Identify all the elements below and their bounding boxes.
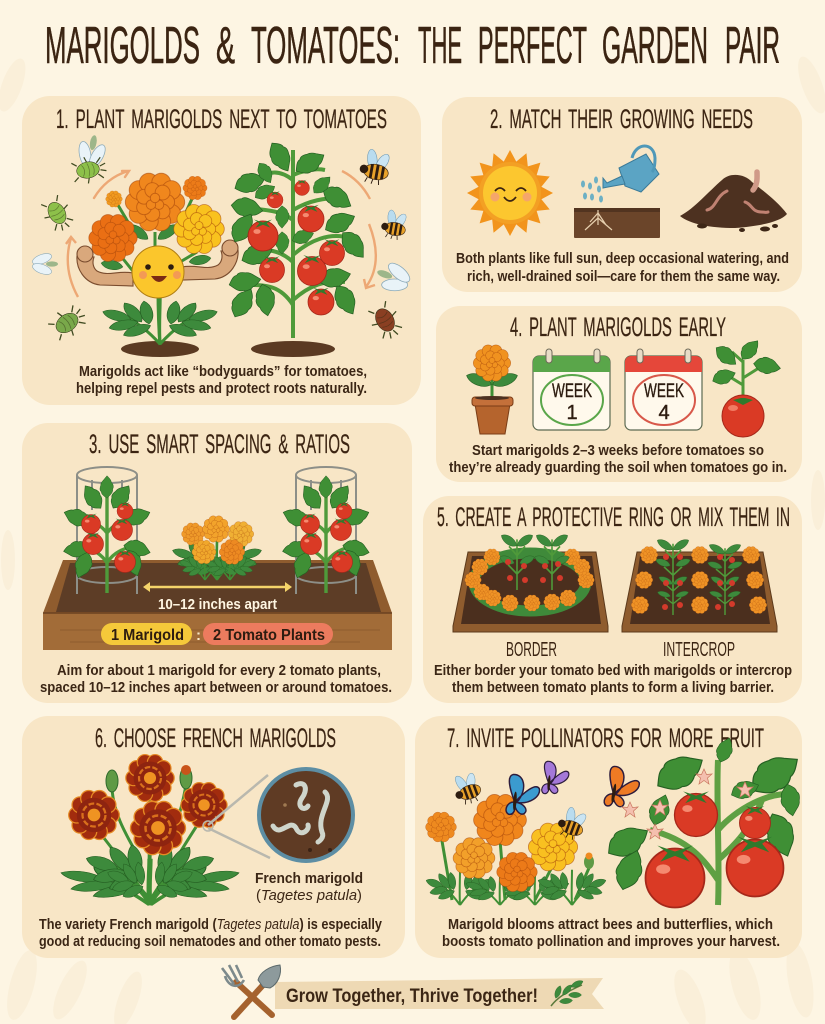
muscle arms [77, 240, 238, 286]
label: french marigold: French marigold [255, 871, 363, 887]
caption 7: Marigold blooms attract bees and butterflies, which [448, 917, 773, 933]
panel: 2. match growing needs [442, 97, 802, 292]
bees and butterflies [449, 761, 642, 842]
caption 4: they’re already guarding the soil when tomatoes go in. [449, 460, 787, 476]
intercrop bed [622, 537, 777, 632]
caption 4: Start marigolds 2–3 weeks before tomatoes so [472, 443, 764, 459]
caption 2: rich, well-drained soil—care for them the same way. [467, 269, 780, 285]
icon: tomato seedling [710, 336, 782, 437]
title [45, 17, 780, 75]
title: MARIGOLDS [45, 17, 200, 75]
smiling face [132, 246, 184, 298]
label: border: BORDER [506, 639, 557, 661]
caption 6: good at reducing soil nematodes and other tomato pests. [39, 934, 381, 950]
heading 1: 1. PLANT MARIGOLDS NEXT TO TOMATOES [56, 104, 387, 134]
calendar: week 1: 1 [566, 402, 578, 424]
icon: compost soil and worm [680, 172, 787, 232]
ratio pills: 2 Tomato Plants [213, 627, 325, 644]
orange arrows [66, 171, 376, 297]
caption 7 [442, 917, 780, 950]
icon: leaf sprig [551, 979, 584, 1006]
footer banner [275, 978, 604, 1009]
ratio pills: : [196, 627, 201, 644]
panel: 1. plant marigolds next to tomatoes [22, 96, 421, 405]
calendar: week 4: WEEK [644, 381, 684, 402]
heading 3: 3. USE SMART SPACING & RATIOS [89, 429, 350, 459]
caption 3 [40, 663, 392, 696]
pests [31, 132, 416, 344]
title: THE [418, 17, 462, 75]
panel: 5. protective ring or mix [423, 496, 802, 703]
raised garden bed [43, 560, 392, 650]
tomato vine [602, 735, 806, 908]
caption 1: helping repel pests and protect roots naturally. [76, 381, 367, 397]
magnified nematodes lens [203, 769, 353, 861]
tomato in cage right [280, 467, 371, 594]
tomato in cage left [61, 467, 152, 594]
title: & [216, 17, 235, 75]
caption 3: Aim for about 1 marigold for every 2 tomato plants, [57, 663, 381, 679]
calendar: week 4: 4 [658, 402, 670, 424]
tomato plant [226, 138, 371, 357]
marigold bodyguard plant [77, 173, 238, 357]
ratio pills [101, 623, 333, 645]
panel: 4. plant marigolds early [436, 306, 802, 482]
caption 5: Either border your tomato bed with marigolds or intercrop [434, 663, 792, 679]
panel: 7. invite pollinators [415, 716, 806, 958]
spacing arrow and label: 10–12 inches apart [158, 597, 277, 613]
marigold cluster [425, 794, 607, 905]
title: GARDEN [602, 17, 708, 75]
caption 5 [434, 663, 792, 696]
label: intercrop: INTERCROP [663, 639, 735, 661]
spacing arrow and label [143, 582, 292, 613]
heading 6: 6. CHOOSE FRENCH MARIGOLDS [95, 723, 336, 753]
border bed [453, 532, 608, 632]
icon: garden fork and trowel [222, 965, 281, 1017]
caption 7: boosts tomato pollination and improves your harvest. [442, 934, 780, 950]
caption 3: spaced 10–12 inches apart between or around tomatoes. [40, 680, 392, 696]
caption 1: Marigolds act like “bodyguards” for tomatoes, [79, 364, 367, 380]
french marigold plant [58, 755, 242, 905]
calendar: week 4 [625, 349, 702, 430]
label: french marigold [255, 871, 363, 904]
caption 5: them between tomato plants to form a living barrier. [452, 680, 774, 696]
panel: 3. smart spacing and ratios [22, 423, 412, 703]
calendar: week 1: WEEK [552, 381, 592, 402]
icon: potted marigold [465, 345, 519, 434]
label: french marigold: (Tagetes patula) [256, 888, 362, 904]
title: PERFECT [478, 17, 587, 75]
ratio pills: 1 Marigold [111, 627, 184, 644]
title: TOMATOES: [251, 17, 400, 75]
panel: 6. choose french marigolds [22, 716, 405, 958]
caption 6 [39, 917, 382, 950]
calendar: week 1 [533, 349, 610, 430]
caption 2 [456, 251, 789, 285]
caption 4 [449, 443, 787, 476]
icon: watering can and soil [574, 146, 660, 238]
marigold bush [171, 516, 263, 580]
caption 6: The variety French marigold (Tagetes patula) is especially [39, 917, 382, 933]
footer slogan: Grow Together, Thrive Together! [286, 986, 538, 1007]
icon: smiling sun [467, 150, 553, 236]
caption 1 [76, 364, 367, 397]
